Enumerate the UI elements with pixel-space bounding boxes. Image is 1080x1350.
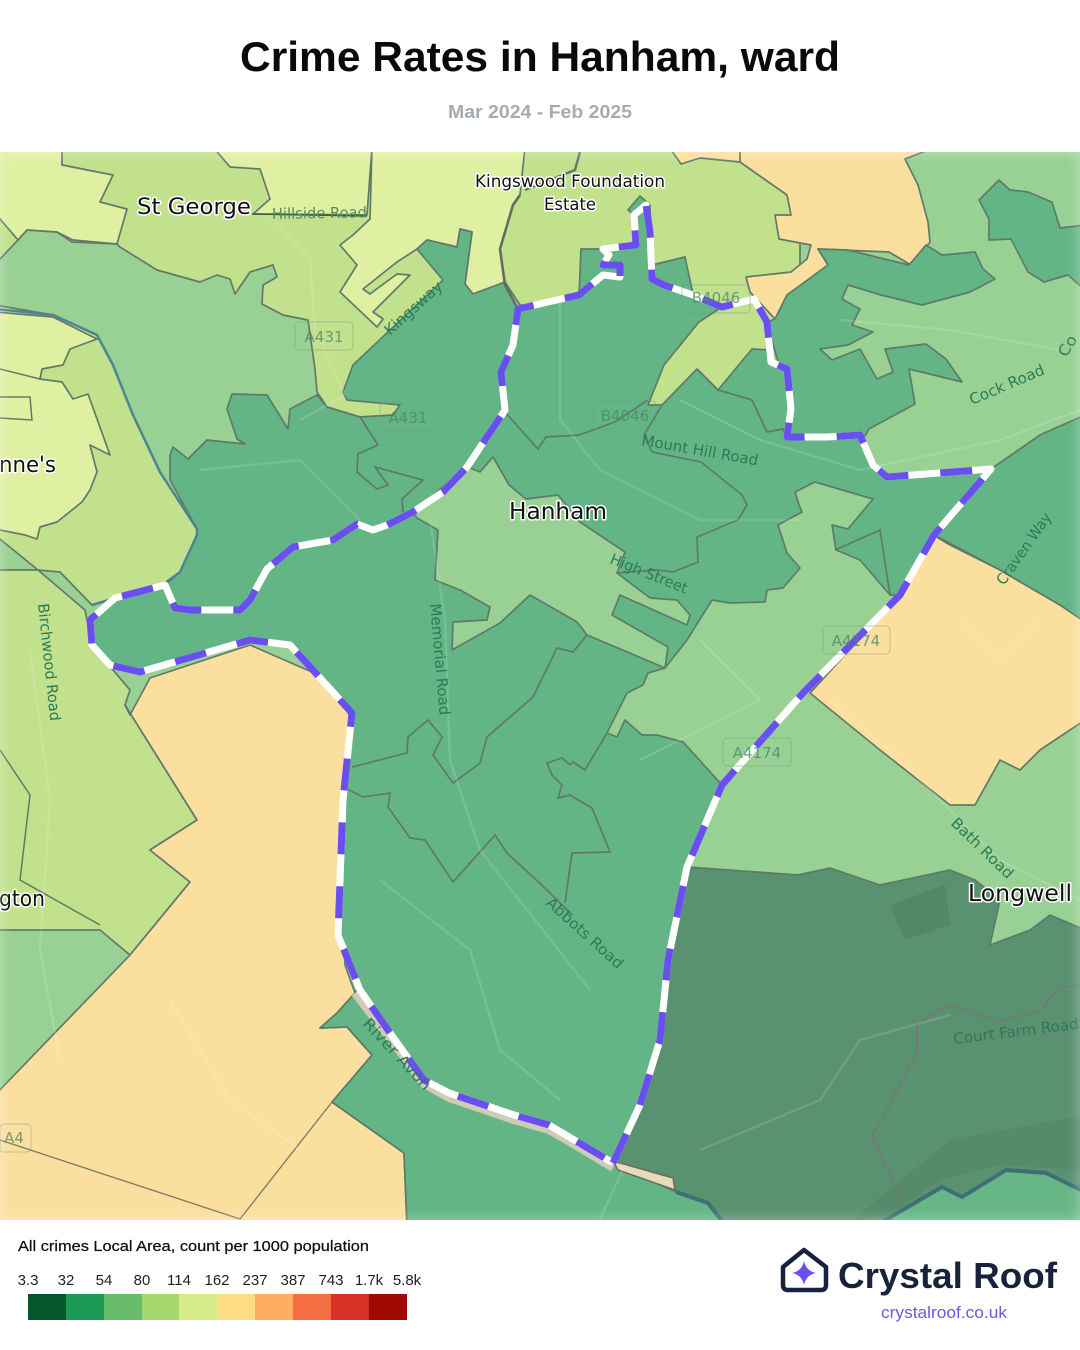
river and boundary lines [0,152,1080,1222]
legend scale values: 743 [318,1272,344,1289]
date range subtitle: Mar 2024 - Feb 2025 [448,102,632,122]
map labels: road shields: A4 [4,1129,24,1147]
legend title: All crimes Local Area, count per 1000 population [18,1238,369,1255]
icon: house with star [783,1250,826,1290]
region: medium green neighbourhoods [90,180,1080,1225]
panel: choropleth map [0,147,1080,1225]
region: lime areas [0,147,800,955]
legend scale values: 1.7k [355,1272,384,1289]
logo: Crystal Roof [783,1250,1058,1296]
map labels: roads: Kingsway [381,277,446,339]
map labels: place names: Kingswood Foundation [475,172,665,192]
map labels: roads [34,203,1080,1094]
legend scale values: 114 [167,1272,191,1289]
legend scale values: 5.8k [393,1272,422,1289]
map labels: road shields: A4174 [832,632,880,650]
map labels: roads: Birchwood Road [34,603,64,722]
legend scale values: 32 [58,1272,74,1289]
legend scale values: 3.3 [18,1272,38,1289]
logo: Crystal Roof: Crystal Roof [838,1255,1058,1296]
region: light green patches inside ward [413,457,900,785]
legend scale values: 54 [96,1272,112,1289]
map labels: road shields: A431 [305,328,343,346]
region: pale yellow areas [0,147,525,539]
map labels: roads: Mount Hill Road [640,431,760,469]
map labels: place names: Longwell [968,881,1072,907]
map labels: road shields: A431 [389,409,427,427]
faint road network [30,215,1080,1219]
legend scale values: 237 [242,1272,268,1289]
map labels: roads: Co [1054,332,1080,360]
title: Crime Rates in Hanham, ward [240,33,840,80]
ward boundary: white line with purple dashes [90,205,991,1163]
map labels: place names: nne's [0,453,56,478]
map labels: place names [0,172,1072,912]
legend scale values: 80 [134,1272,150,1289]
legend colour ramp [28,1294,407,1320]
map labels: roads: Hillside Road [272,203,367,223]
legend scale values [18,1272,422,1289]
legend scale values: 387 [280,1272,306,1289]
map labels: road shields: A4174 [733,744,781,762]
map labels: road shields: B4046 [601,407,649,425]
map labels: roads: Craven Way [993,509,1056,588]
legend scale values: 162 [204,1272,230,1289]
region: darkest green south-east [613,867,1080,1225]
map labels: roads: Memorial Road [426,603,454,716]
map labels: roads: Abbots Road [542,894,627,973]
map labels: roads: Court Farm Road [952,1015,1080,1048]
map labels: roads: Bath Road [947,814,1017,882]
map labels: roads: High Street [608,550,690,597]
region: lime wedge inside ward [648,299,771,405]
map labels: roads: River Avon [359,1014,435,1094]
map labels: place names: gton [0,887,45,912]
map labels: place names: St George [137,195,251,220]
region: peach areas [0,147,1080,1225]
map labels: roads: Cock Road [967,361,1047,409]
map labels: place names: Hanham [509,499,607,525]
map labels: road shields: B4046 [692,289,740,307]
website link: crystalroof.co.uk [881,1304,1008,1322]
map labels: road shields [0,285,890,1152]
map labels: place names: Estate [544,195,596,215]
